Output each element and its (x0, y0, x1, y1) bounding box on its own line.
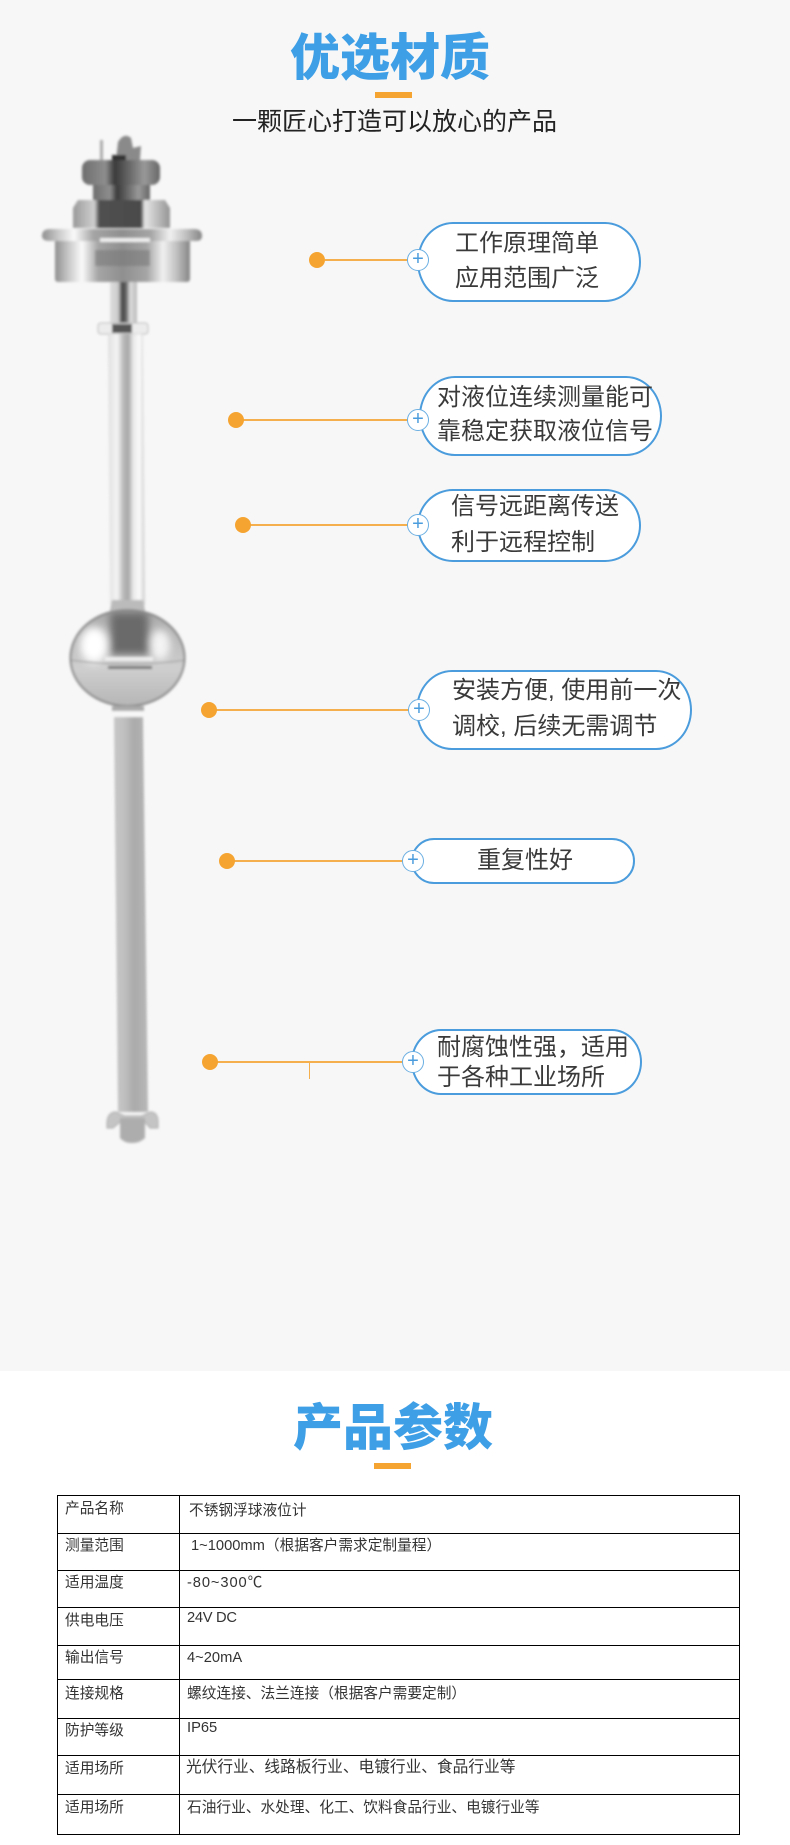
parameter table (57, 1495, 740, 1835)
text line 1: 对液位连续测量能可 (437, 384, 653, 411)
subheading: 一颗匠心打造可以放心的产品 (232, 108, 557, 136)
row: protection: 防护等级 (65, 1723, 124, 1739)
bubble (411, 1029, 642, 1095)
bubble (417, 489, 641, 562)
ball (109, 600, 146, 615)
plus icon: + (407, 849, 419, 871)
bottom nut (107, 1112, 158, 1128)
collar (98, 323, 148, 334)
row: output signal: 输出信号 (65, 1650, 124, 1666)
product image: stainless float level gauge (40, 134, 204, 1144)
row: supply voltage: 供电电压 (65, 1613, 124, 1629)
plus icon: + (413, 698, 425, 720)
row: protection (65, 1720, 217, 1739)
dot (201, 702, 217, 718)
callout 3: long-distance signal (235, 489, 641, 562)
lower tube (114, 717, 148, 1112)
row: measuring range: 测量范围 (65, 1538, 124, 1554)
plus icon (408, 699, 430, 721)
callout 2: continuous measurement (228, 376, 662, 456)
callout 5: repeatability (219, 838, 635, 884)
heading: material: 优选材质 (290, 18, 490, 90)
row: protection: IP65 (187, 1720, 217, 1736)
callout 6: corrosion resistance (202, 1029, 642, 1095)
row: application 2: 石油行业、水处理、化工、饮料食品行业、电镀行业等 (187, 1800, 540, 1816)
text line 2: 应用范围广泛 (455, 265, 599, 292)
dot (235, 517, 251, 533)
row: application 2: 适用场所 (65, 1800, 124, 1816)
row: measuring range: 1~1000mm（根据客户需求定制量程） (191, 1538, 441, 1554)
row: temperature: -80~300℃ (187, 1575, 263, 1591)
row: temperature (65, 1574, 263, 1591)
upper tube (108, 334, 145, 605)
row: supply voltage (65, 1610, 237, 1629)
accent bar: material (375, 92, 412, 98)
bubble (416, 670, 692, 750)
callout 4: easy installation (201, 670, 692, 750)
row: product name: 不锈钢浮球液位计 (189, 1503, 307, 1519)
row: temperature: 适用温度 (65, 1575, 124, 1591)
hex nut (73, 200, 170, 228)
stem (110, 282, 137, 324)
text line 1: 信号远距离传送 (451, 493, 619, 520)
accent bar: parameters (374, 1463, 411, 1469)
row: application 2 (65, 1799, 540, 1816)
text line 2: 调校, 后续无需调节 (452, 713, 657, 740)
row: output signal: 4~20mA (187, 1650, 242, 1666)
row: measuring range (65, 1537, 441, 1554)
plus icon (402, 1051, 424, 1073)
text line 2: 于各种工业场所 (437, 1064, 605, 1091)
text line 1: 安装方便, 使用前一次 (452, 677, 681, 704)
row: application 1: 适用场所 (65, 1761, 124, 1777)
dot (309, 252, 325, 268)
cap (82, 160, 160, 185)
row: output signal (65, 1649, 242, 1666)
flange (55, 238, 190, 282)
dot (228, 412, 244, 428)
plus icon (407, 514, 429, 536)
text line 1: 耐腐蚀性强，适用 (437, 1034, 629, 1061)
connector pins (100, 140, 103, 160)
row: application 1: 光伏行业、线路板行业、电镀行业、食品行业等 (186, 1759, 515, 1776)
panel: material section background (0, 0, 790, 1371)
callout 1: simple principle (309, 222, 641, 302)
heading: parameters: 产品参数 (293, 1388, 493, 1460)
dot (202, 1054, 218, 1070)
row: connection (65, 1685, 466, 1702)
row: connection: 连接规格 (65, 1686, 124, 1702)
text line 1: 工作原理简单 (455, 230, 599, 257)
row: product name (65, 1500, 307, 1519)
row: application 1 (65, 1758, 515, 1777)
dot (219, 853, 235, 869)
row: connection: 螺纹连接、法兰连接（根据客户需要定制） (187, 1686, 466, 1702)
plus icon: + (412, 248, 424, 270)
plus icon (407, 249, 429, 271)
bubble (419, 376, 662, 456)
plus icon: + (407, 1050, 419, 1072)
plus icon: + (412, 513, 424, 535)
text: 重复性好 (477, 847, 573, 874)
plus icon (402, 850, 424, 872)
row: supply voltage: 24V DC (187, 1610, 237, 1626)
row: product name: 产品名称 (65, 1501, 124, 1517)
plus icon (407, 409, 429, 431)
text line 2: 靠稳定获取液位信号 (437, 418, 653, 445)
text line 2: 利于远程控制 (451, 529, 595, 556)
bubble (417, 222, 641, 302)
plus icon: + (412, 408, 424, 430)
bubble (411, 838, 635, 884)
